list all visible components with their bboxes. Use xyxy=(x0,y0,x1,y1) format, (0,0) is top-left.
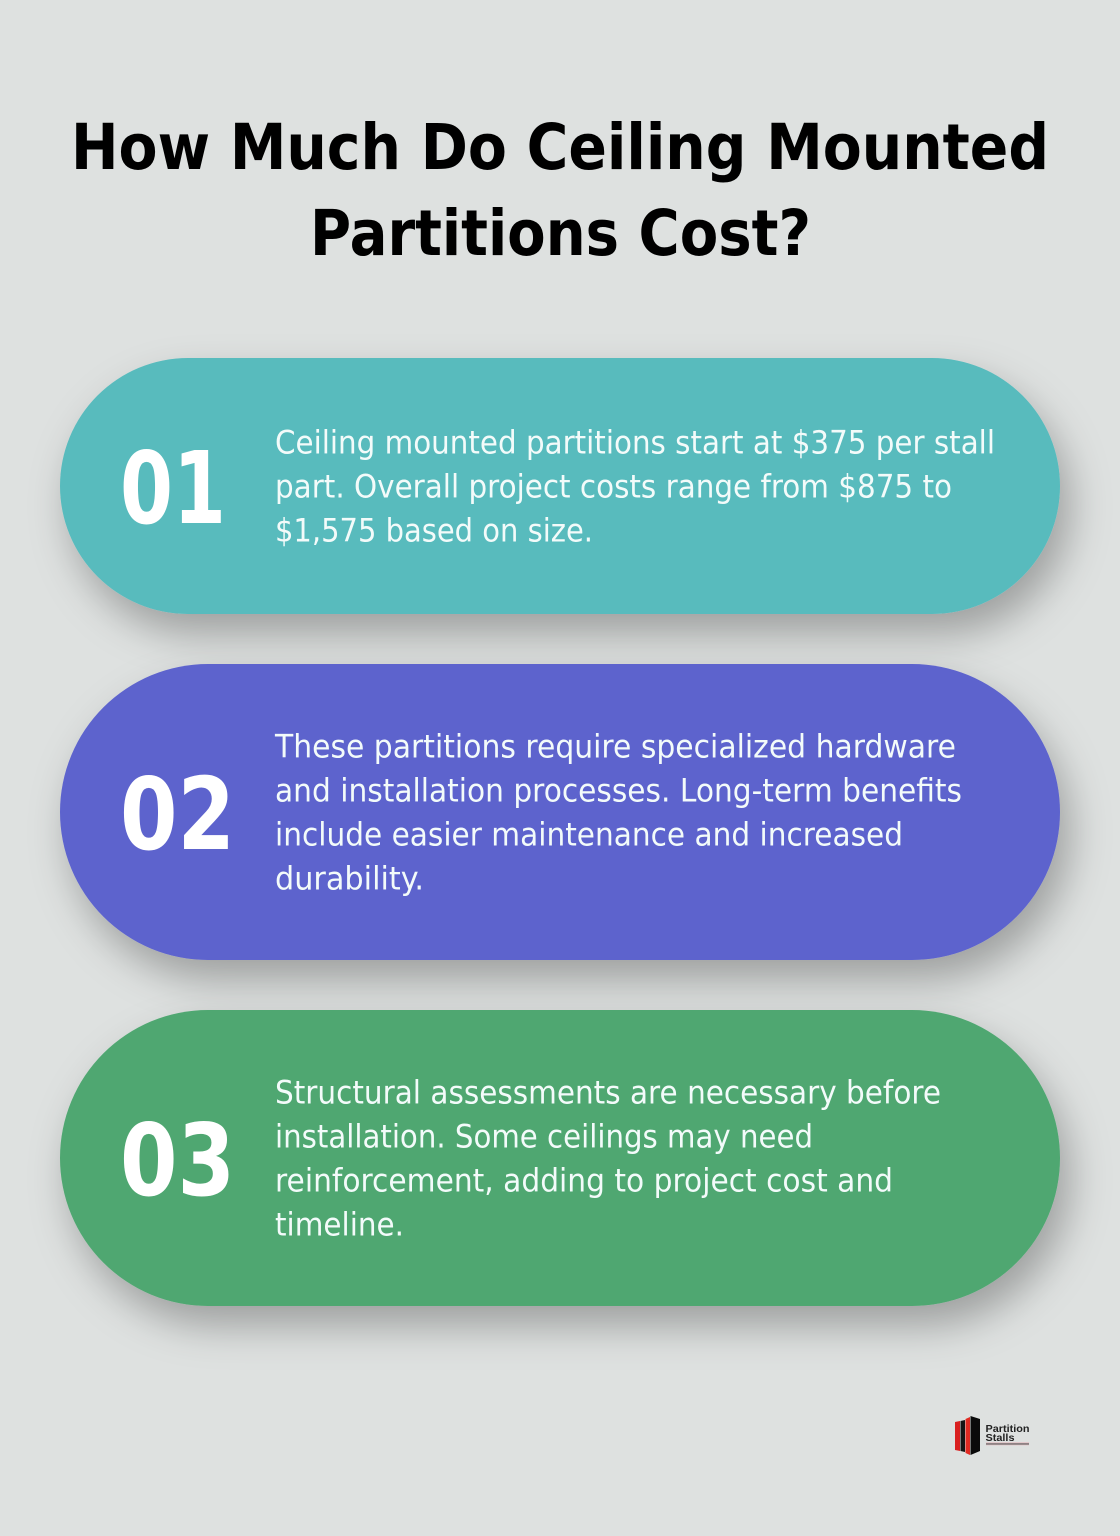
logo: Partition Stalls xyxy=(955,1416,1030,1455)
title: Partitions Cost? xyxy=(310,197,811,270)
card 01 text xyxy=(275,424,995,550)
card 03 text: Structural assessments are necessary before xyxy=(275,1074,941,1112)
card 03 text: timeline. xyxy=(275,1206,404,1244)
card 02 text: and installation processes. Long-term benefits xyxy=(275,772,962,810)
logo wordmark xyxy=(986,1424,1030,1446)
logo wordmark: Stalls xyxy=(986,1433,1015,1444)
card 01 background xyxy=(60,358,1060,614)
card 02 text: include easier maintenance and increased xyxy=(275,816,903,854)
panel: card 03 xyxy=(60,1010,1060,1306)
card 01 text: Ceiling mounted partitions start at $375 per stall xyxy=(275,424,995,462)
title xyxy=(71,111,1049,270)
panel: card 02 xyxy=(60,664,1060,960)
card 02 background xyxy=(60,664,1060,960)
icon: partition panels xyxy=(955,1416,980,1455)
card 03 background xyxy=(60,1010,1060,1306)
panel: card 01 xyxy=(60,358,1060,614)
card 03 text: reinforcement, adding to project cost and xyxy=(275,1162,893,1200)
card 02 text: durability. xyxy=(275,860,424,898)
card 01 text: part. Overall project costs range from $875 to xyxy=(275,468,952,506)
card 02 text: These partitions require specialized hardware xyxy=(274,728,956,766)
card 03 text: installation. Some ceilings may need xyxy=(275,1118,813,1156)
card 01 number: 01 xyxy=(120,430,226,547)
card 02 text xyxy=(274,728,962,898)
card 02 number: 02 xyxy=(120,756,235,873)
card 01 text: $1,575 based on size. xyxy=(275,512,593,550)
card 03 text xyxy=(275,1074,941,1244)
logo wordmark: Partition xyxy=(986,1424,1030,1435)
card 03 number: 03 xyxy=(120,1102,235,1219)
